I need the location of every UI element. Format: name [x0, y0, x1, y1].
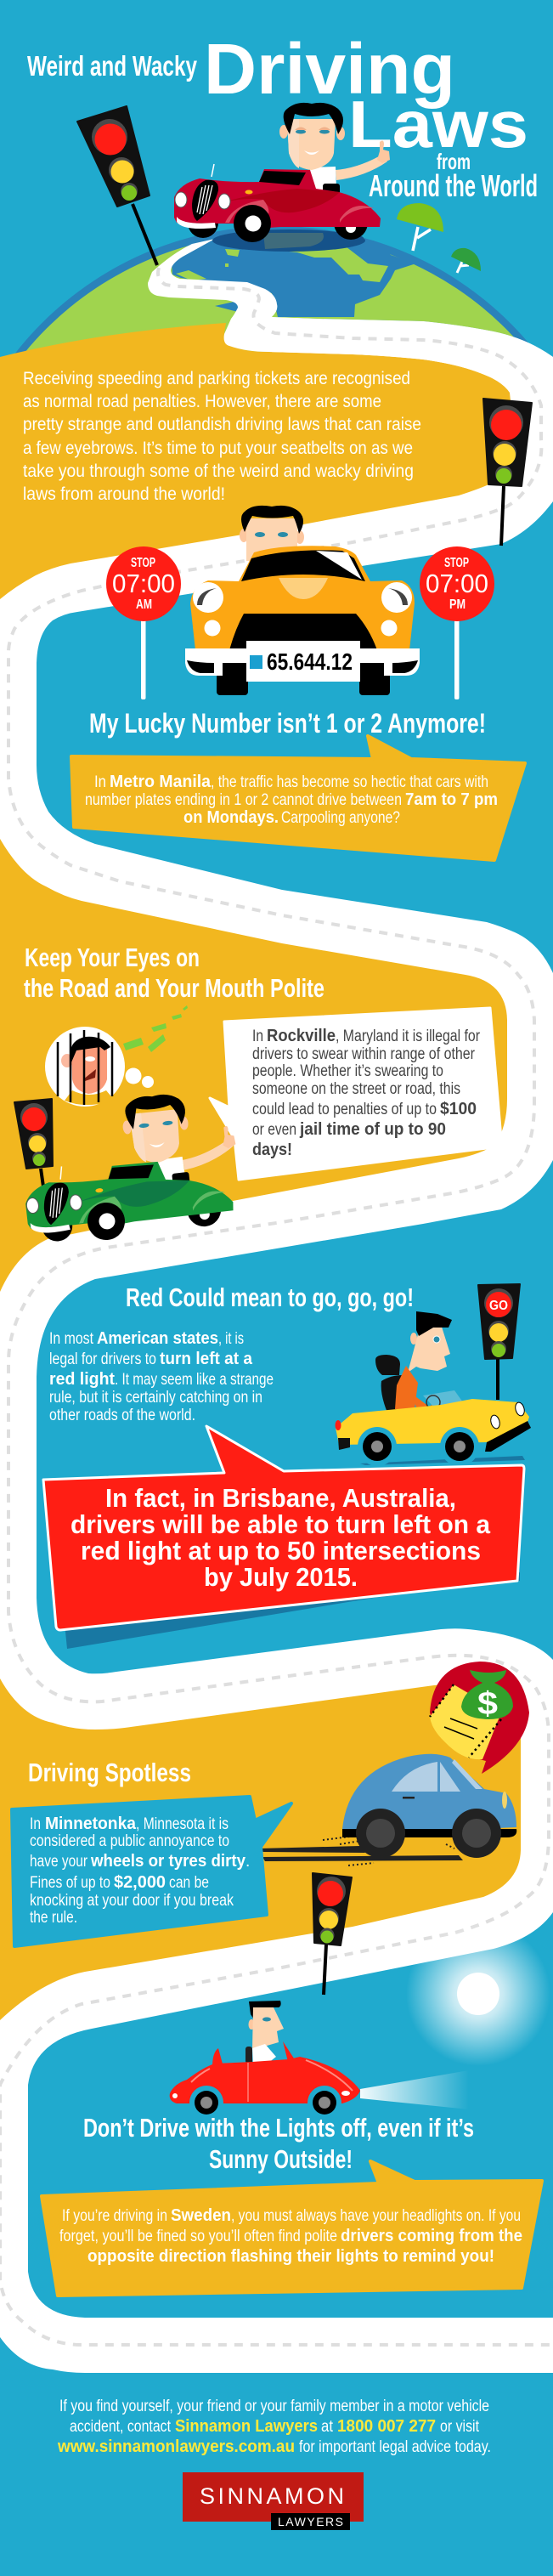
footer contact text: for important legal advice today. — [299, 2438, 491, 2456]
icon: tree large — [397, 203, 443, 251]
icon: stop sign AM — [106, 546, 181, 699]
callout: minnetonka: considered a public annoyance to — [30, 1832, 229, 1850]
callout: rockville — [210, 1008, 501, 1180]
callout: sweden: drivers coming from the — [341, 2227, 522, 2245]
callout: metro manila: Metro Manila — [110, 773, 212, 791]
icon: man behind yellow car — [240, 506, 304, 561]
heading: keep your eyes on the road — [24, 943, 324, 1003]
callout: rockville: In — [252, 1028, 263, 1045]
footer contact text: www.sinnamonlawyers.com.au — [57, 2437, 295, 2456]
callout: minnetonka: $2,000 — [114, 1873, 166, 1892]
logo: sinnamon lawyers: LAWYERS — [278, 2515, 343, 2528]
callout: minnetonka: Fines of up to — [30, 1874, 110, 1892]
icon: orange car front — [185, 546, 420, 695]
icon: stop sign PM: 07:00 — [426, 569, 488, 598]
callout: rockville: people. Whether it’s swearing to — [252, 1062, 443, 1080]
text: american states: other roads of the world. — [49, 1407, 195, 1424]
icon: traffic light header — [77, 106, 157, 265]
panel: blue section lucky number — [37, 501, 553, 973]
icon: skid marks — [259, 1836, 463, 1865]
callout: rockville: jail time of up to 90 — [299, 1120, 446, 1139]
footer contact text — [57, 2398, 491, 2456]
callout: minnetonka: . — [245, 1853, 250, 1871]
icon: globe — [15, 227, 528, 354]
logo: sinnamon lawyers: SINNAMON — [200, 2483, 344, 2509]
callout: brisbane — [43, 1426, 524, 1649]
icon: green convertible car — [22, 1148, 236, 1248]
callout: sweden: If you’re driving in — [62, 2207, 167, 2225]
intro text: as normal road penalties. However, there are some — [23, 392, 381, 411]
text: american states: red light — [49, 1370, 115, 1389]
callout: metro manila: , the traffic has become so hectic that cars with — [211, 773, 488, 791]
icon: stop sign PM: STOP — [444, 556, 469, 570]
title: Driving — [204, 29, 455, 109]
text: american states: . It may seem like a strange — [115, 1371, 274, 1389]
callout: minnetonka: have your — [30, 1853, 88, 1871]
icon: thought bubble jail — [45, 1005, 188, 1107]
icon: driver in yellow car — [335, 1311, 531, 1466]
callout: rockville: or even — [252, 1121, 296, 1139]
panel: footer — [0, 2337, 553, 2576]
icon: traffic light go — [478, 1284, 520, 1400]
number plate: 65.644.12 — [267, 648, 353, 675]
heading: driving spotless: Driving Spotless — [28, 1758, 191, 1787]
icon: tree small — [451, 248, 481, 273]
text: american states: American states — [97, 1329, 218, 1348]
callout: metro manila: on Mondays. — [183, 808, 279, 827]
icon: headlight beam — [360, 2070, 469, 2109]
footer contact text: accident, contact — [70, 2418, 172, 2436]
icon: traffic light rockville — [14, 1099, 53, 1192]
icon: man waving — [279, 103, 390, 191]
heading: keep your eyes on the road: Keep Your Eyes on — [25, 943, 200, 972]
road: header winding section — [148, 239, 553, 408]
icon: man waving rockville — [120, 1087, 239, 1187]
heading: lights off — [83, 2113, 474, 2174]
heading: lights off: Sunny Outside! — [209, 2144, 353, 2174]
callout: rockville: Rockville — [267, 1027, 336, 1045]
icon: stop sign AM: STOP — [131, 556, 155, 570]
panel: yellow section driving spotless — [0, 1679, 521, 2020]
text: american states — [49, 1329, 274, 1424]
callout: metro manila: In — [94, 773, 106, 791]
icon: blue car dirty wheels — [342, 1754, 516, 1858]
text: american states: rule, but it is certainly catching on in — [49, 1389, 262, 1407]
intro text: a few eyebrows. It’s time to put your seatbelts on as we — [23, 439, 413, 458]
callout: minnetonka: can be — [169, 1874, 209, 1892]
intro text — [23, 369, 421, 504]
icon: traffic light headlights — [313, 1873, 352, 1995]
callout: metro manila: 7am to 7 pm — [405, 790, 498, 809]
callout: rockville: could lead to penalties of up to — [252, 1101, 437, 1118]
footer contact text: at — [321, 2418, 334, 2436]
callout: metro manila: Carpooling anyone? — [281, 809, 400, 827]
text: american states: , it is — [218, 1330, 244, 1348]
callout: rockville: someone on the street or road, this — [252, 1080, 460, 1098]
icon: stop sign AM: AM — [136, 597, 152, 612]
icon: driver in red car — [170, 2001, 365, 2120]
title: Laws — [348, 87, 528, 161]
title — [27, 29, 538, 203]
footer contact text: 1800 007 277 — [337, 2417, 436, 2436]
panel: blue section red light — [37, 1160, 553, 1673]
icon: traffic light intro — [483, 399, 532, 546]
text: american states: legal for drivers to — [49, 1350, 156, 1368]
callout: metro manila: number plates ending in 1 or 2 cannot drive between — [85, 791, 402, 809]
callout: brisbane: red light at up to 50 intersections — [81, 1536, 481, 1565]
panel: intro yellow band — [0, 323, 515, 599]
logo: sinnamon lawyers — [183, 2472, 364, 2530]
callout: minnetonka: knocking at your door if you break — [30, 1892, 234, 1910]
callout: rockville: , Maryland it is illegal for — [336, 1028, 481, 1045]
icon: fine ticket bubble: $ — [477, 1686, 498, 1722]
heading: keep your eyes on the road: the Road and Your Mouth Polite — [24, 973, 324, 1003]
intro text: pretty strange and outlandish driving laws that can raise — [23, 415, 421, 434]
intro text: Receiving speeding and parking tickets are recognised — [23, 369, 410, 388]
icon: red convertible car — [174, 164, 381, 242]
heading: red could mean go: Red Could mean to go, go, go! — [126, 1282, 414, 1312]
callout: sweden: opposite direction flashing their lights to remind you! — [87, 2247, 494, 2266]
callout: sweden — [42, 2161, 542, 2296]
callout: brisbane: drivers will be able to turn left on a — [71, 1509, 491, 1539]
callout: metro manila — [71, 736, 525, 860]
callout: sweden: forget, you’ll be fined so you’ll often find polite — [59, 2228, 337, 2245]
callout: brisbane: In fact, in Brisbane, Australia, — [105, 1483, 456, 1513]
icon: traffic light go: GO — [489, 1299, 508, 1313]
callout: minnetonka: , Minnesota it is — [136, 1815, 229, 1833]
text: american states: turn left at a — [160, 1350, 253, 1368]
callout: minnetonka — [12, 1797, 291, 1946]
footer contact text: or visit — [440, 2418, 480, 2436]
panel: yellow section rockville — [0, 839, 507, 1292]
callout: minnetonka: Minnetonka — [45, 1815, 137, 1833]
callout: rockville: $100 — [440, 1100, 477, 1118]
callout: rockville: drivers to swear within range of other — [252, 1045, 476, 1063]
icon: stop sign PM: PM — [449, 597, 466, 612]
icon: sun — [406, 1922, 550, 2066]
panel: blue section headlights — [28, 1912, 553, 2318]
text: american states: In most — [49, 1330, 94, 1348]
number plate — [246, 641, 360, 682]
callout: minnetonka: wheels or tyres dirty — [90, 1852, 246, 1871]
panel: header sky — [0, 0, 553, 374]
callout: sweden: Sweden — [171, 2206, 231, 2225]
icon: fine ticket bubble — [430, 1662, 529, 1774]
callout: brisbane: by July 2015. — [204, 1562, 358, 1592]
callout: rockville: days! — [252, 1141, 292, 1159]
title: from — [437, 149, 471, 174]
icon: stop sign AM: 07:00 — [112, 569, 175, 598]
callout: minnetonka: the rule. — [30, 1909, 77, 1927]
title: Weird and Wacky — [27, 50, 197, 82]
footer contact text: Sinnamon Lawyers — [175, 2417, 318, 2436]
icon: stop sign PM — [420, 546, 494, 699]
icon: car shadow — [212, 229, 365, 252]
intro text: laws from around the world! — [23, 484, 225, 504]
callout: minnetonka: In — [30, 1815, 41, 1833]
intro text: take you through some of the weird and wacky driving — [23, 461, 414, 481]
